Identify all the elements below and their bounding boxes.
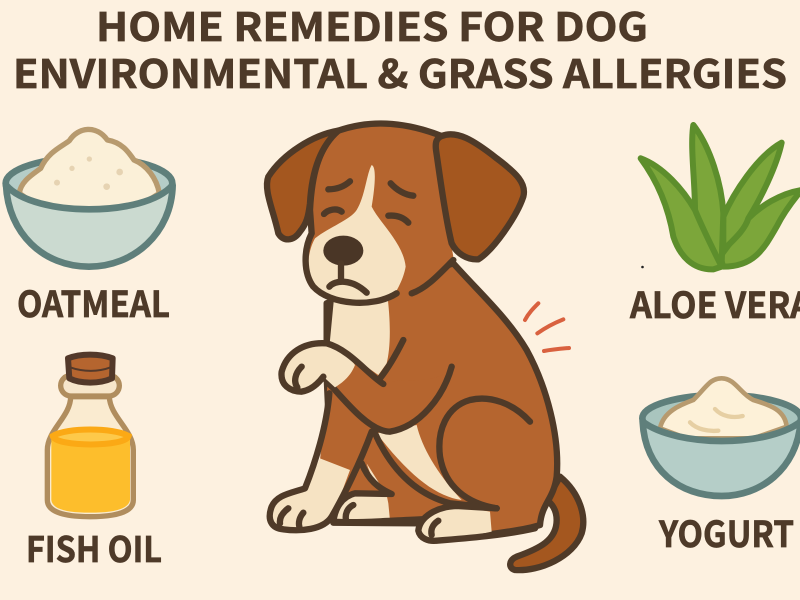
icon: oatmeal bowl [6,129,173,267]
chest and belly patches [327,290,390,375]
right ear [436,134,524,259]
face: mouth [329,263,367,293]
hind leg [439,399,530,508]
title [13,0,787,100]
left ear [267,131,338,239]
raised paw [281,343,355,392]
muzzle and blaze [308,165,406,302]
raised arm [330,365,452,432]
tail [510,477,583,570]
label: oatmeal: OATMEAL [17,276,170,328]
illustration: sad dog [267,123,583,570]
scratch marks [525,303,569,351]
icon: fish oil bottle [47,355,133,517]
hind paw [419,507,492,540]
face: brows and eyes [324,181,413,223]
dot [641,266,644,268]
icon: aloe vera [641,125,800,269]
raised leg fill and front leg [320,387,372,470]
back front leg [333,463,392,523]
icon: yogurt bowl [642,378,800,496]
title: ENVIRONMENTAL & GRASS ALLERGIES [13,44,787,100]
label: fish oil: FISH OIL [26,522,162,573]
head [306,123,453,303]
face: nose [323,236,363,266]
body [327,263,557,541]
